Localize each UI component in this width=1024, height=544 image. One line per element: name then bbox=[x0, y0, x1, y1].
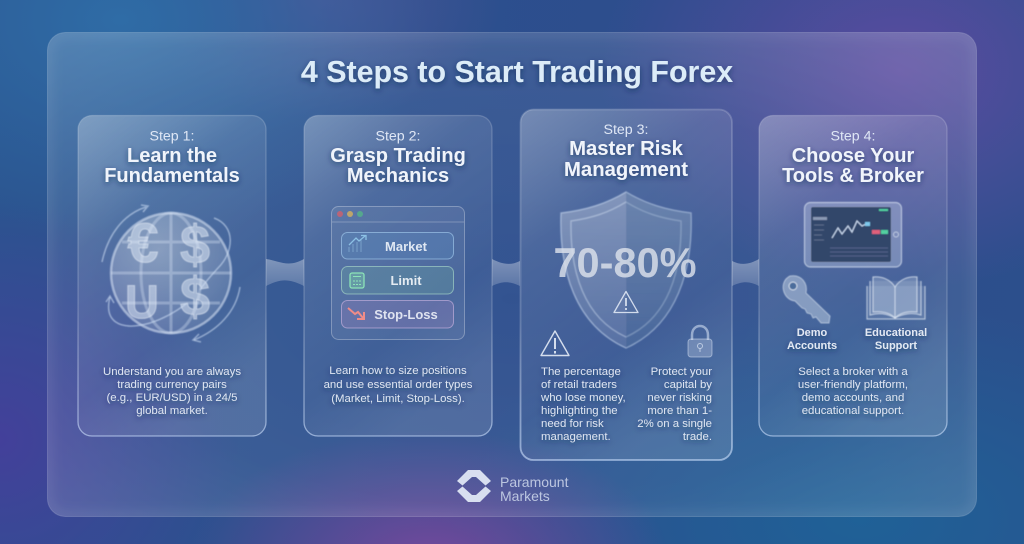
risk description left: need for risk bbox=[541, 418, 604, 430]
logo mark bbox=[457, 470, 491, 502]
step 1 heading: Learn the bbox=[127, 145, 217, 167]
risk description right: never risking bbox=[647, 392, 712, 404]
step 4 description bbox=[798, 366, 908, 417]
label: Educational Support: Support bbox=[875, 340, 917, 352]
title: 4 Steps to Start Trading Forex bbox=[301, 55, 733, 89]
label: Demo Accounts bbox=[787, 327, 837, 352]
logo wordmark: Markets bbox=[500, 488, 550, 504]
icon: padlock bbox=[688, 326, 712, 357]
risk description right: 2% on a single bbox=[637, 418, 712, 430]
step 4 description: educational support. bbox=[802, 405, 904, 417]
icon: shield bbox=[561, 192, 691, 348]
step 2 description bbox=[324, 365, 473, 405]
step 4 heading bbox=[782, 145, 924, 187]
step 2 label: Step 2: bbox=[376, 128, 420, 144]
step 4 description: Select a broker with a bbox=[798, 366, 908, 378]
step 2 description: (Market, Limit, Stop-Loss). bbox=[331, 393, 465, 405]
connector: step 1 to step 2 bbox=[266, 259, 304, 286]
icon: globe with currency symbols bbox=[102, 205, 240, 342]
label: Demo Accounts: Demo bbox=[797, 327, 828, 339]
step 4 label: Step 4: bbox=[831, 128, 875, 144]
icon: warning triangle bbox=[541, 331, 569, 356]
risk description left: The percentage bbox=[541, 366, 621, 378]
statistic: 70-80%: 70-80% bbox=[553, 239, 697, 286]
step 1 description bbox=[103, 366, 241, 417]
risk description left: management. bbox=[541, 431, 611, 443]
icon: key bbox=[783, 276, 830, 323]
step 2 description: and use essential order types bbox=[324, 379, 473, 391]
icon: shield warning bbox=[614, 292, 638, 312]
panel: step 1 bbox=[78, 116, 266, 436]
label: Demo Accounts: Accounts bbox=[787, 340, 837, 352]
step 4 heading: Tools & Broker bbox=[782, 165, 924, 187]
step 3 heading: Master Risk bbox=[569, 138, 684, 160]
step 4 description: demo accounts, and bbox=[802, 392, 904, 404]
step 2 description: Learn how to size positions bbox=[329, 365, 467, 377]
connector: step 2 to step 3 bbox=[492, 259, 520, 286]
icon: tablet with trading chart bbox=[804, 202, 902, 267]
label: Educational Support bbox=[865, 327, 927, 352]
risk description right: Protect your bbox=[651, 366, 712, 378]
logo: Paramount Markets bbox=[457, 470, 569, 504]
step 3 label: Step 3: bbox=[604, 122, 648, 138]
label: Educational Support: Educational bbox=[865, 327, 927, 339]
panel: step 4 bbox=[759, 116, 947, 436]
button: Stop-Loss: Stop-Loss bbox=[374, 307, 438, 322]
button: Market: Market bbox=[385, 239, 428, 254]
icon: globe with currency symbols: € bbox=[127, 211, 159, 274]
risk description right: capital by bbox=[664, 379, 712, 391]
step 2 heading: Grasp Trading bbox=[330, 145, 466, 167]
step 1 heading bbox=[104, 145, 240, 187]
risk description right bbox=[637, 366, 712, 443]
step 1 heading: Fundamentals bbox=[104, 165, 240, 187]
step 3 heading: Management bbox=[564, 159, 688, 181]
icon: globe with currency symbols: $ bbox=[180, 215, 210, 275]
panel: step 3 bbox=[520, 110, 732, 460]
step 2 heading: Mechanics bbox=[347, 165, 449, 187]
icon: open book bbox=[867, 277, 925, 319]
step 1 label: Step 1: bbox=[150, 128, 194, 144]
icon: globe with currency symbols: U bbox=[125, 275, 159, 328]
risk description left: of retail traders bbox=[541, 379, 617, 391]
connector: step 3 to step 4 bbox=[732, 259, 759, 286]
step 1 description: global market. bbox=[136, 405, 208, 417]
step 4 description: user-friendly platform, bbox=[798, 379, 908, 391]
order window bbox=[332, 206, 464, 340]
risk description left: highlighting the bbox=[541, 405, 618, 417]
step 1 description: Understand you are always bbox=[103, 366, 241, 378]
risk description right: trade. bbox=[683, 431, 712, 443]
step 2 heading bbox=[330, 145, 466, 187]
step 3 heading bbox=[564, 138, 688, 181]
logo wordmark: Paramount bbox=[500, 474, 569, 490]
step 4 heading: Choose Your bbox=[792, 145, 915, 167]
risk description left: who lose money, bbox=[540, 392, 626, 404]
icon: globe with currency symbols: $ bbox=[180, 267, 210, 327]
logo wordmark bbox=[500, 474, 569, 504]
step 1 description: trading currency pairs bbox=[117, 379, 227, 391]
panel: step 2 bbox=[304, 116, 492, 436]
risk description right: more than 1- bbox=[647, 405, 712, 417]
button: Limit: Limit bbox=[390, 273, 422, 288]
risk description left bbox=[540, 366, 626, 443]
step 1 description: (e.g., EUR/USD) in a 24/5 bbox=[106, 392, 238, 404]
